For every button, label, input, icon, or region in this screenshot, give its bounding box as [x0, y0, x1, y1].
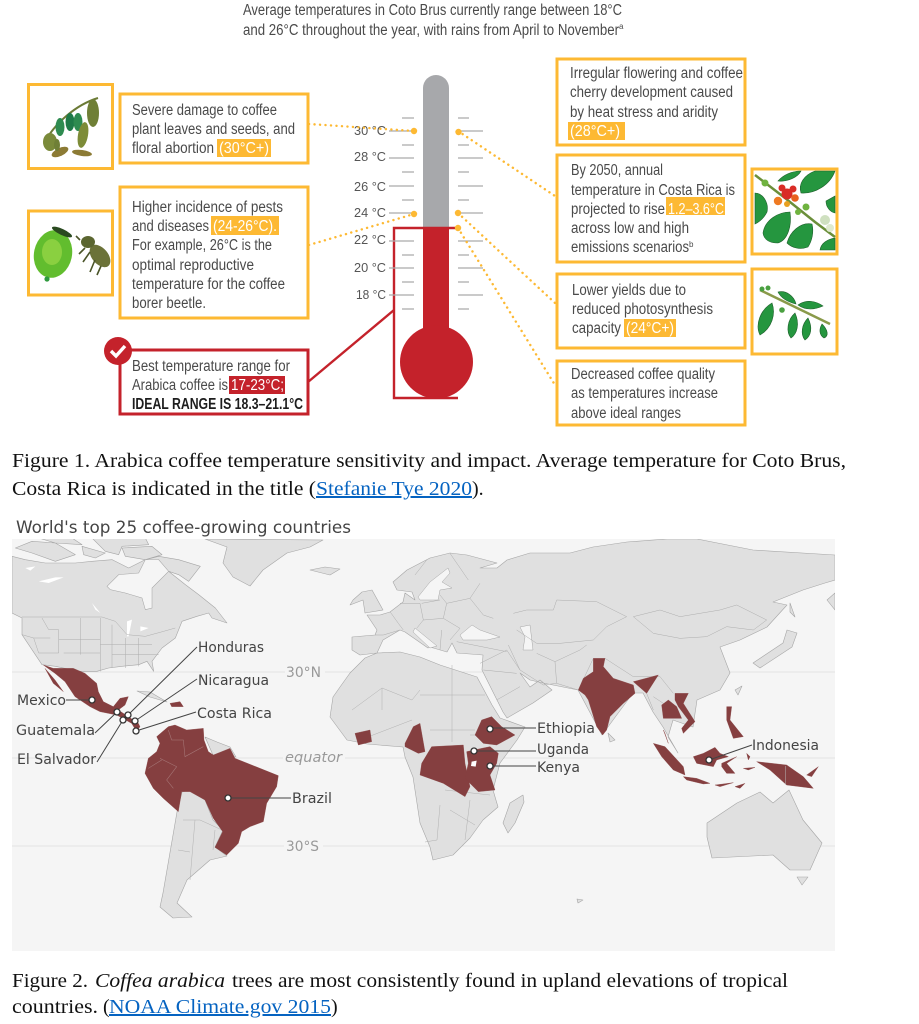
coffee-growing countries: africa and asia-pacific: [405, 658, 818, 797]
inland seas: [413, 568, 533, 650]
country labels: Kenya: [537, 760, 580, 776]
temperature labels: 18 °C: [356, 288, 386, 302]
country labels: Brazil: [292, 791, 332, 807]
temperature labels: 20 °C: [354, 261, 386, 275]
land: british isles and islands: [350, 590, 835, 833]
heading: Coto Brus temperatures: a: [619, 22, 624, 31]
icon: wilted coffee branch: [28, 84, 112, 168]
world map of coffee-growing countries: [12, 538, 835, 951]
temperature labels: 28 °C: [354, 150, 386, 164]
text block: lower yields: [557, 274, 745, 348]
text block: irregular flowering: (28°C+): [570, 123, 620, 140]
caption: figure 1: ).: [472, 478, 484, 500]
temperature labels: 30 °C: [354, 124, 386, 138]
text block: pests and diseases: temperature for the coffee: [132, 276, 285, 293]
text block: decreased quality: as temperatures increase: [571, 385, 718, 402]
callout: best temperature range: [104, 310, 394, 414]
text block: decreased quality: [557, 361, 745, 425]
text block: pests and diseases: Higher incidence of pests: [132, 199, 283, 216]
country labels: Ethiopia: [537, 721, 595, 737]
temperature labels: 24 °C: [354, 206, 386, 220]
country borders: africa: [352, 665, 497, 842]
text block: severe damage: floral abortion: [132, 140, 214, 157]
text block: projected rise by 2050: By 2050, annual: [571, 162, 663, 179]
text block: lower yields: Lower yields due to: [572, 282, 686, 299]
left scale ticks: [389, 118, 414, 309]
text block: severe damage: Severe damage to coffee: [132, 102, 277, 119]
text block: pests and diseases: (24-26°C).: [213, 218, 277, 235]
text block: pests and diseases: [120, 187, 308, 318]
location markers: [89, 697, 712, 801]
map title: World's top 25 coffee-growing countries: [16, 518, 351, 538]
text block: pests and diseases: and diseases: [132, 218, 209, 235]
caption: figure 1: [12, 450, 846, 500]
country borders: europe: [375, 553, 507, 652]
right scale ticks: [458, 118, 483, 309]
heading: Coto Brus temperatures: Average temperatures in Coto Brus currently range between 18°C: [243, 2, 622, 19]
text block: projected rise by 2050: projected to rise: [571, 201, 665, 218]
latitude lines: [12, 672, 835, 846]
caption: figure 2: Figure 2.: [12, 970, 88, 992]
callout: best temperature range: Best temperature range for: [132, 358, 290, 375]
ideal range bracket: [394, 228, 458, 398]
land: africa: [330, 652, 525, 860]
text block: decreased quality: Decreased coffee quality: [571, 366, 715, 383]
thermometer tube: grey upper part: [423, 75, 449, 228]
text block: projected rise by 2050: across low and high: [571, 220, 689, 237]
coffee-growing countries: americas: [43, 665, 372, 855]
text block: projected rise by 2050: b: [689, 240, 694, 249]
callout: best temperature range: 17-23°C;: [231, 377, 284, 394]
text block: irregular flowering: [557, 59, 745, 145]
country labels: El Salvador: [17, 752, 96, 768]
latitude labels: [285, 665, 343, 855]
infographic: Arabica temperature sensitivity: [28, 2, 837, 425]
country labels: Honduras: [198, 640, 264, 656]
caption: figure 2: Coffea arabica: [95, 970, 225, 992]
text block: severe damage: plant leaves and seeds, and: [132, 121, 295, 138]
thermometer red mercury and bulb: [400, 228, 473, 398]
text block: lower yields: capacity: [572, 320, 621, 337]
dotted connector lines and markers: [309, 124, 555, 385]
land: south america: [160, 737, 236, 918]
land: greenland and iceland: [205, 539, 340, 586]
caption: figure 2: (: [103, 996, 110, 1018]
caption: figure 2: countries.: [12, 996, 98, 1018]
caption: figure 1: Costa Rica is indicated in the title (: [12, 478, 316, 500]
caption: figure 2: trees are most consistently found in upland elevations of tropical: [232, 970, 788, 992]
text block: irregular flowering: by heat stress and aridity: [570, 104, 718, 121]
icon: coffee cherry and borer beetle: [28, 211, 114, 295]
text block: severe damage: [120, 94, 308, 163]
land: caribbean: [137, 691, 167, 702]
callout: best temperature range: Arabica coffee is: [132, 377, 228, 394]
thermometer with scale: [354, 75, 483, 398]
caption: figure 2: [12, 970, 788, 1018]
land: north america: [12, 538, 227, 671]
latitude labels: 30°N: [286, 665, 321, 681]
land: australia: [707, 790, 822, 870]
text block: projected rise by 2050: emissions scenarios: [571, 239, 689, 256]
heading: Coto Brus temperatures: [243, 2, 624, 39]
text block: lower yields: reduced photosynthesis: [572, 301, 713, 318]
country labels: [16, 640, 819, 807]
leader lines: [66, 647, 752, 798]
text block: irregular flowering: cherry development caused: [570, 84, 733, 101]
temperature labels: 22 °C: [354, 233, 386, 247]
land: eurasia: [352, 539, 835, 753]
text block: lower yields: (24°C+): [626, 320, 674, 337]
country labels: Nicaragua: [198, 673, 269, 689]
text block: projected rise by 2050: [557, 155, 745, 262]
text block: irregular flowering: Irregular flowering and coffee: [570, 65, 743, 82]
latitude labels: 30°S: [286, 839, 319, 855]
country labels: Indonesia: [752, 738, 819, 754]
caption: figure 2: NOAA Climate.gov 2015: [109, 996, 331, 1018]
text block: pests and diseases: For example, 26°C is the: [132, 237, 272, 254]
country labels: Guatemala: [16, 723, 95, 739]
icon: coffee branch with red cherries: [752, 169, 837, 254]
country borders: asia: [480, 600, 767, 710]
caption: figure 1: Figure 1. Arabica coffee temperature sensitivity and impact. Average temperature for Coto Brus,: [12, 450, 846, 472]
text block: projected rise by 2050: 1.2–3.6°C: [668, 201, 724, 218]
text block: decreased quality: above ideal ranges: [571, 405, 681, 422]
text block: severe damage: (30°C+): [219, 140, 269, 157]
text block: pests and diseases: optimal reproductive: [132, 257, 254, 274]
connector to ideal range bracket: [308, 310, 394, 382]
text block: projected rise by 2050: temperature in Costa Rica is: [571, 182, 735, 199]
heading: Coto Brus temperatures: and 26°C throughout the year, with rains from April to November: [243, 22, 619, 39]
country labels: Uganda: [537, 742, 589, 758]
country labels: Costa Rica: [197, 706, 272, 722]
temperature labels: 26 °C: [354, 180, 386, 194]
temperature labels: [354, 124, 386, 302]
icon: check mark badge: [104, 337, 132, 365]
callout: best temperature range: IDEAL RANGE IS 18.3–21.1°C: [132, 396, 303, 413]
country labels: Mexico: [17, 693, 66, 709]
icon: coffee branch with leaves: [752, 269, 837, 354]
caption: figure 2: ): [331, 996, 338, 1018]
latitude labels: equator: [285, 750, 343, 766]
text block: pests and diseases: borer beetle.: [132, 295, 206, 312]
caption: figure 1: Stefanie Tye 2020: [316, 478, 472, 500]
